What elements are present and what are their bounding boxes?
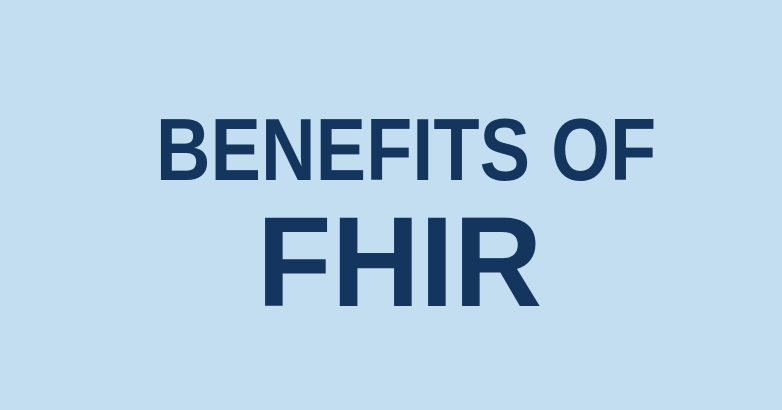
title line 2: FHIR (257, 191, 542, 334)
title (156, 100, 656, 334)
title line 1: BENEFITS OF (156, 100, 656, 198)
